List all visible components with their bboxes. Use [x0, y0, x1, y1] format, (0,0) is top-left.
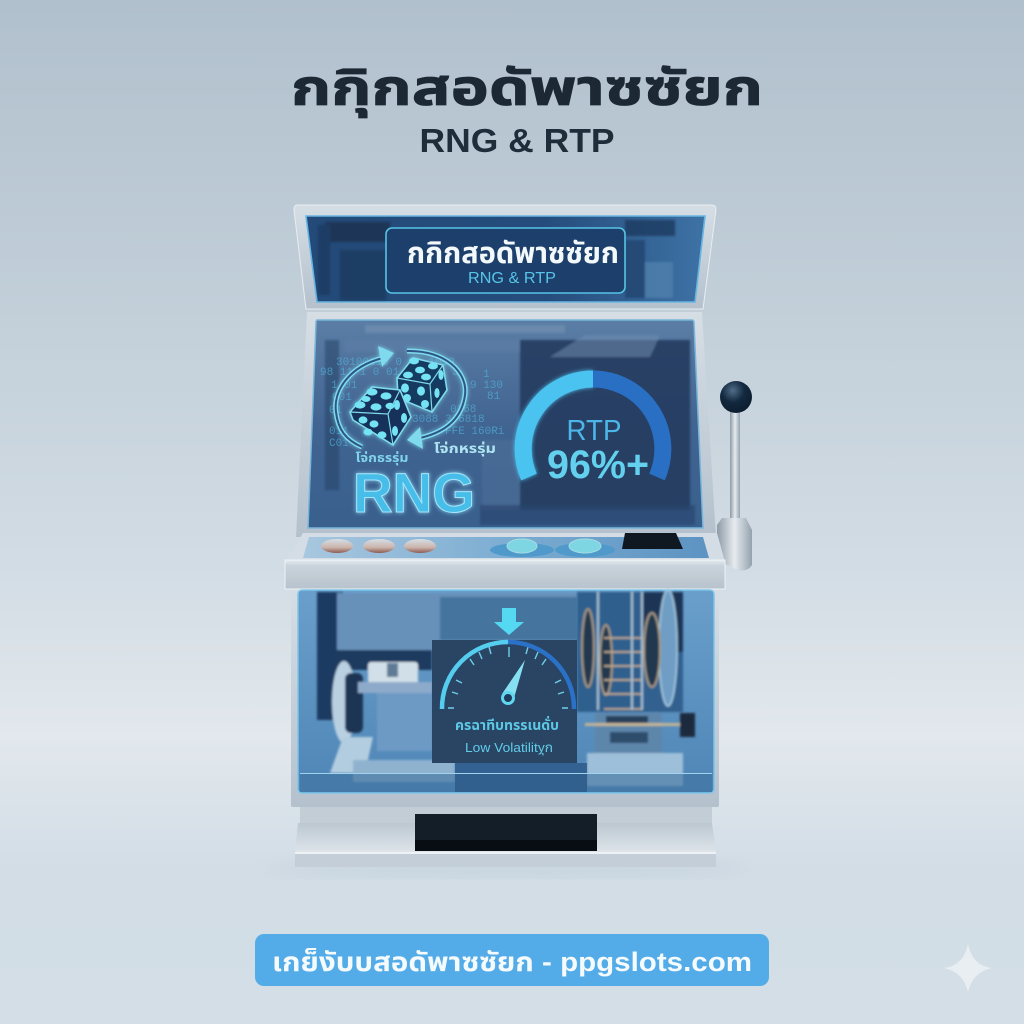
title: RNG & RTP [420, 122, 614, 159]
binary data stream: 1 01 [331, 380, 358, 392]
glass window [298, 590, 714, 793]
label: right rng caption: โจ่กหรรุ่ม [434, 441, 496, 456]
buttons [321, 539, 615, 557]
icon: dice with cycle arrows [336, 346, 465, 449]
binary data stream: 81 [487, 391, 501, 403]
binary data stream: 3088 3.6818 [412, 414, 485, 426]
label: left rng caption: โจ่กธรรุ่ม [356, 451, 408, 465]
gauge ticks [448, 647, 568, 708]
rtp gauge: RTP [566, 415, 622, 447]
black switch [622, 533, 683, 549]
machine shadow [266, 861, 746, 875]
screen machinery [325, 325, 695, 525]
lever [717, 381, 752, 570]
die back [397, 358, 447, 412]
volatility label thai: ครฉาทีบทรรเนดั่บ [455, 715, 559, 733]
marquee sign [386, 228, 625, 293]
slot machine [266, 205, 752, 875]
title [291, 60, 763, 159]
marquee sign: กกิกสอดัพาซซัยก [407, 238, 619, 270]
down arrow [494, 608, 524, 635]
binary data stream: FFE 160Ri [445, 426, 505, 438]
bottom banner: เกย็งับบสอดัพาซซัยก - ppgslots.com [272, 947, 752, 977]
main screen [308, 320, 703, 528]
rtp gauge: 96%+ [547, 443, 649, 487]
binary data stream: 1 [483, 369, 490, 381]
marquee machinery [318, 220, 675, 300]
binary data stream: 0168 [450, 404, 476, 416]
binary data stream: 30100110 0 01 1010 [336, 357, 455, 369]
upper cabinet [296, 312, 716, 537]
base foot [295, 806, 716, 867]
binary data stream: 011 [329, 426, 349, 438]
die front [350, 387, 411, 445]
binary data stream: C01 [329, 438, 349, 450]
inner machinery left [317, 592, 577, 782]
marquee sign: RNG & RTP [468, 270, 556, 287]
rtp gauge [523, 379, 663, 487]
needle [502, 660, 525, 698]
lower cabinet [285, 560, 725, 807]
glass floor [300, 763, 712, 792]
binary data stream [320, 357, 505, 450]
bottom banner [255, 934, 769, 986]
binary data stream: 9 130 [470, 380, 503, 392]
inner machinery right [577, 590, 695, 786]
cycle arrows [336, 351, 465, 447]
black coin tray [415, 814, 597, 851]
volatility label english: Low Volatilityุก [465, 740, 553, 755]
title: กกิุกสอดัพาซซัยก [291, 60, 763, 118]
rng heading: RNG [353, 461, 475, 524]
binary data stream: 001 [332, 392, 352, 404]
marquee [294, 205, 716, 309]
icon: sparkle [944, 944, 992, 992]
volatility panel [432, 608, 577, 763]
binary data stream: 98 11 1 0 01 01 1 0 3 [320, 367, 459, 379]
binary data stream: 01 [329, 405, 343, 417]
console with buttons [285, 533, 725, 562]
